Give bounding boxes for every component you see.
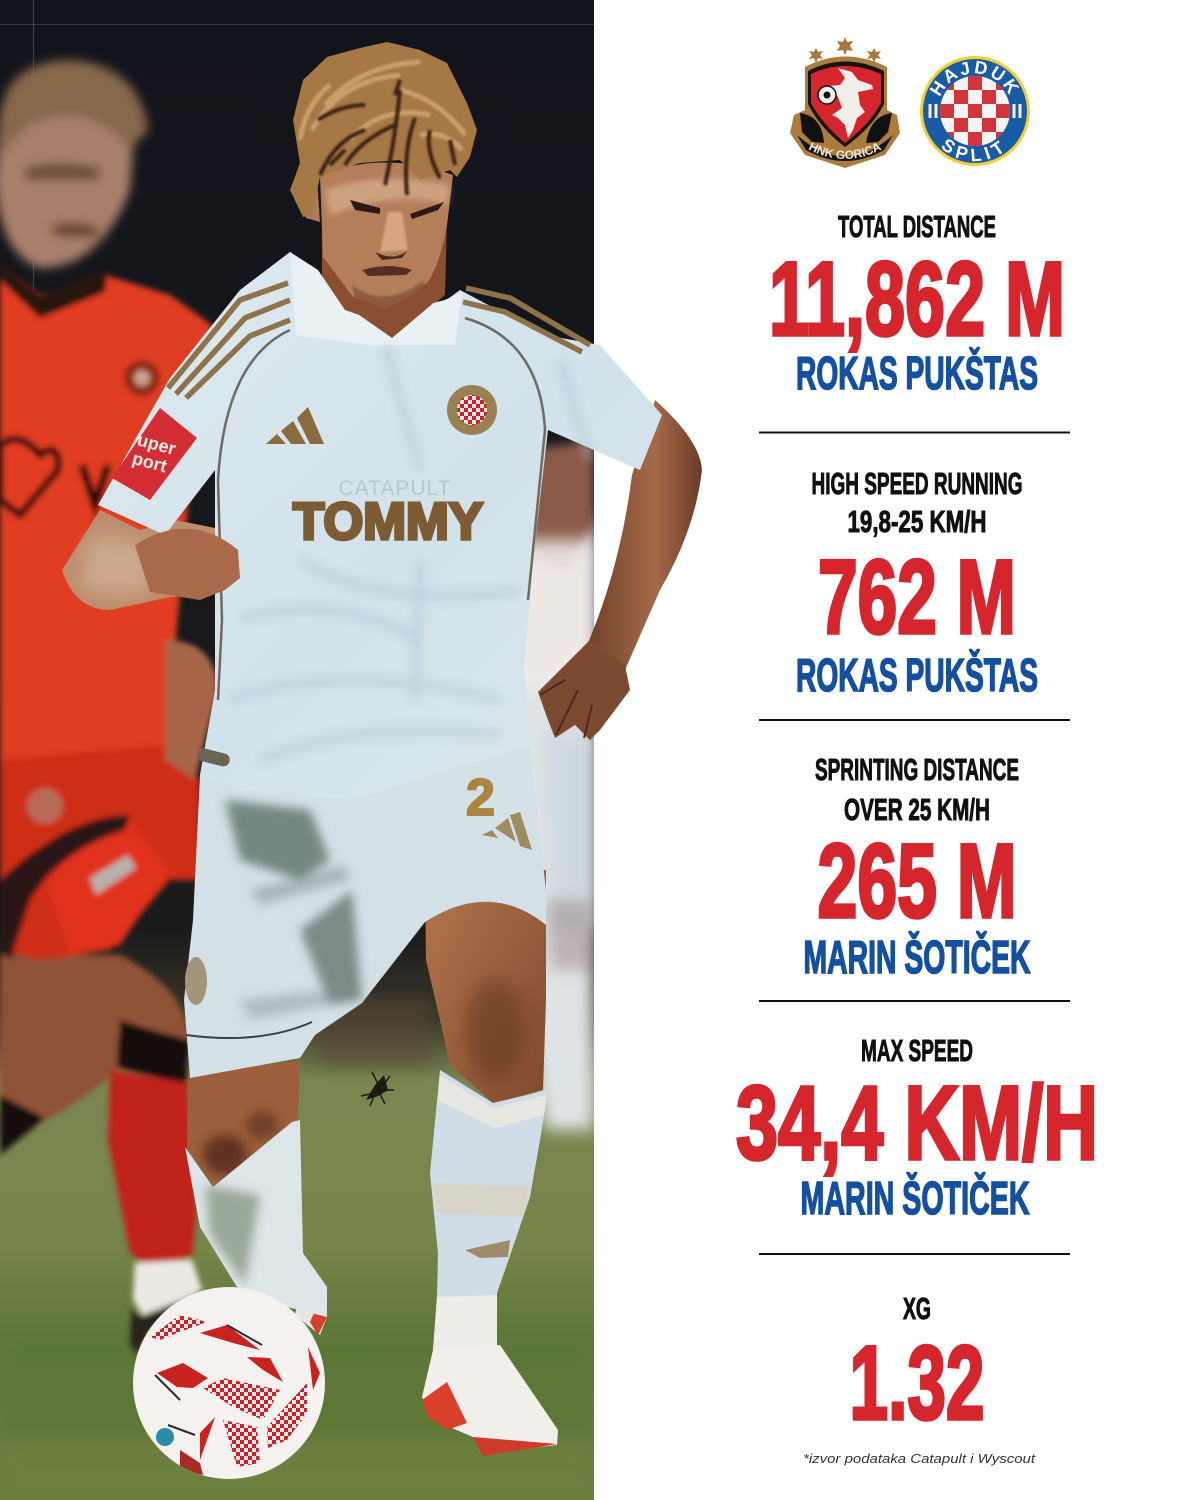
match ball [133, 1287, 325, 1479]
jersey folds [230, 345, 590, 760]
stat: high speed running [796, 466, 1038, 701]
sponsor text on jersey: TOMMY [293, 493, 483, 551]
hair [290, 42, 477, 217]
collar [290, 252, 462, 346]
main player in white Hajduk kit [62, 42, 702, 1479]
logo: Hajduk Split [920, 56, 1030, 166]
stat: total distance: ROKAS PUKŠTAS [796, 347, 1038, 399]
logos row [790, 37, 1030, 168]
stat: xG [850, 1291, 984, 1442]
stat: total distance: 11,862 M [769, 241, 1065, 358]
stat: sprinting distance [804, 752, 1030, 983]
sponsor sleeve patch [112, 408, 197, 500]
stat: max speed [736, 1033, 1098, 1224]
sponsor sleeve patch: port [130, 448, 169, 476]
stat: high speed running: 19,8-25 KM/H [848, 504, 986, 539]
forearm highlights [80, 537, 150, 594]
stat: total distance [769, 209, 1065, 399]
jersey gold shoulder stripes [168, 283, 590, 398]
shorts crest [185, 957, 207, 1005]
sponsor text on jersey: CATAPULT [338, 477, 452, 500]
left arm [62, 510, 240, 610]
stat: high speed running: 762 M [818, 539, 1016, 656]
stat: sprinting distance: SPRINTING DISTANCE [815, 752, 1019, 787]
adidas logo [266, 407, 324, 444]
hands [135, 529, 630, 740]
logo: Hajduk Split: SPLIT [942, 139, 1002, 162]
legs [187, 870, 546, 1190]
opponent player in red, out of focus [0, 60, 218, 1355]
shorts number: 2 [466, 769, 495, 827]
jersey body [98, 252, 662, 800]
stat: xG: XG [903, 1291, 931, 1326]
waistband tag [197, 747, 231, 768]
logo: HNK Gorica [790, 37, 900, 168]
stars [809, 37, 881, 63]
shorts shadows [225, 800, 362, 1020]
photo panel: player action shot [0, 0, 702, 1500]
socks and boots [185, 1070, 558, 1456]
stat: sprinting distance: OVER 25 KM/H [844, 792, 990, 827]
neck V opening [322, 262, 437, 338]
source footnote: *izvor podataka Catapult i Wyscout [803, 1451, 1037, 1466]
Hajduk crest on jersey [447, 385, 497, 435]
stat: max speed: MARIN ŠOTIČEK [800, 1172, 1030, 1224]
neck and face [298, 162, 453, 345]
sponsor sleeve patch: uper [135, 429, 178, 459]
logo: Hajduk Split: HAJDUK [930, 60, 1020, 96]
stat: xG: 1.32 [850, 1325, 984, 1442]
shorts hem seam [186, 1022, 312, 1038]
stat: max speed: MAX SPEED [861, 1033, 973, 1068]
stat: high speed running: ROKAS PUKŠTAS [796, 649, 1038, 701]
right arm [585, 400, 702, 700]
stat: sprinting distance: MARIN ŠOTIČEK [804, 931, 1030, 983]
logo: HNK Gorica: HNK GORICA [808, 142, 882, 159]
shorts [184, 735, 546, 1078]
stat: high speed running: HIGH SPEED RUNNING [812, 466, 1022, 501]
stadium and pitch background [0, 0, 594, 1500]
shorts adidas logo [482, 812, 532, 850]
stat: sprinting distance: 265 M [818, 823, 1016, 940]
jersey sleeve seams [218, 318, 545, 700]
stat: total distance: TOTAL DISTANCE [838, 209, 996, 244]
insect on pitch [361, 1072, 394, 1106]
